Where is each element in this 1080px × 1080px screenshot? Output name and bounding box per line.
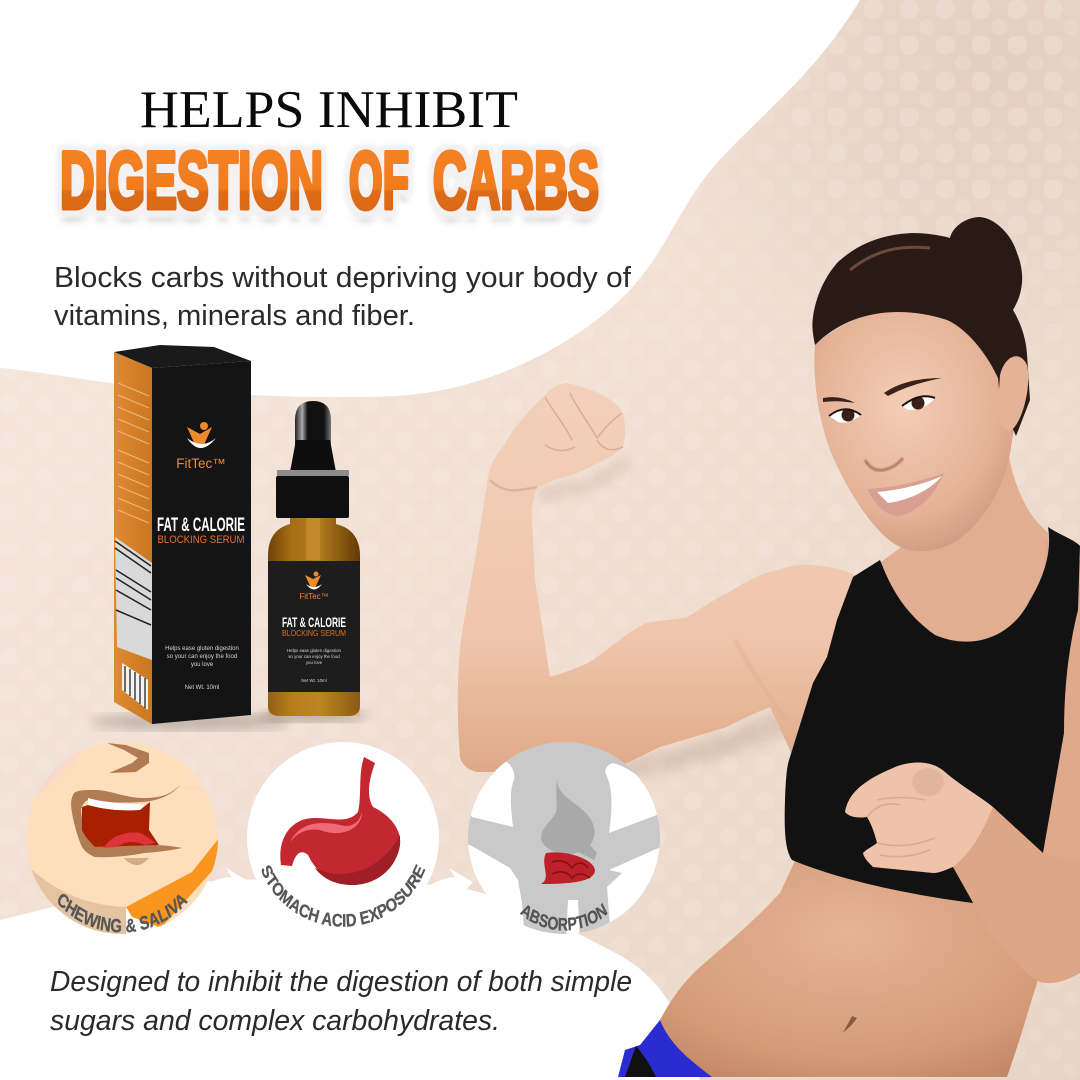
brows [823, 378, 942, 403]
product box: you love [191, 662, 214, 668]
product box: Net Wt. 10ml [185, 685, 219, 691]
product box: Helps ease gluten digestion [165, 646, 239, 652]
title: helps inhibit: HELPS INHIBIT [140, 81, 518, 139]
smile [867, 473, 944, 516]
serum bottle: Helps ease gluten digestion [287, 648, 342, 653]
woman [458, 217, 1080, 1077]
raised arm [458, 383, 860, 786]
right shoulder [1040, 540, 1080, 870]
box logo: FitTec™ [176, 456, 226, 471]
intro text: Blocks carbs without depriving your body of [54, 262, 632, 294]
bottle logo [299, 572, 329, 601]
intestines [541, 852, 595, 884]
intro text [54, 262, 632, 332]
serum bottle: you love [306, 660, 323, 665]
product box [90, 345, 290, 730]
label: stomach acid exposure: STOMACH ACID EXPOSURE [262, 864, 426, 927]
pointing hand and forearm [845, 762, 1080, 983]
title: digestion of carbs: CARBS [433, 136, 599, 226]
serum bottle: FAT & CALORIE [282, 614, 346, 630]
title: digestion of carbs: DIGESTION [60, 136, 323, 226]
step 3: absorption [468, 742, 660, 934]
circles connector arrows [205, 868, 473, 902]
product box: BLOCKING SERUM [158, 534, 244, 546]
ear [998, 356, 1028, 431]
head [812, 217, 1030, 551]
step 1: chewing and saliva [26, 742, 218, 934]
box logo [176, 422, 226, 471]
closing text: sugars and complex carbohydrates. [50, 1005, 500, 1037]
blue waistband [618, 1020, 712, 1077]
closing text: Designed to inhibit the digestion of both simple [50, 966, 632, 998]
step 2: stomach acid exposure [247, 742, 439, 927]
stomach [280, 757, 400, 885]
navel [842, 1016, 857, 1033]
torso [640, 840, 1060, 1077]
nose [865, 458, 903, 470]
hair [812, 217, 1030, 436]
bottle logo: FitTec™ [299, 592, 329, 601]
eyes [829, 410, 861, 423]
black top [785, 527, 1080, 903]
intro text: vitamins, minerals and fiber. [54, 300, 415, 332]
closing text [50, 966, 632, 1037]
product box: so your can enjoy the food [167, 654, 237, 660]
product box: FAT & CALORIE [157, 515, 245, 536]
serum bottle: Net Wt. 10ml [301, 678, 327, 683]
title: digestion of carbs: OF [349, 136, 409, 226]
label: absorption: ABSORPTION [520, 903, 608, 931]
serum bottle [258, 401, 368, 722]
neck and chest [860, 450, 1060, 650]
serum bottle: BLOCKING SERUM [282, 629, 346, 638]
label: chewing and saliva: CHEWING & SALIVA [58, 894, 188, 932]
serum bottle: so your can enjoy the food [288, 654, 340, 659]
